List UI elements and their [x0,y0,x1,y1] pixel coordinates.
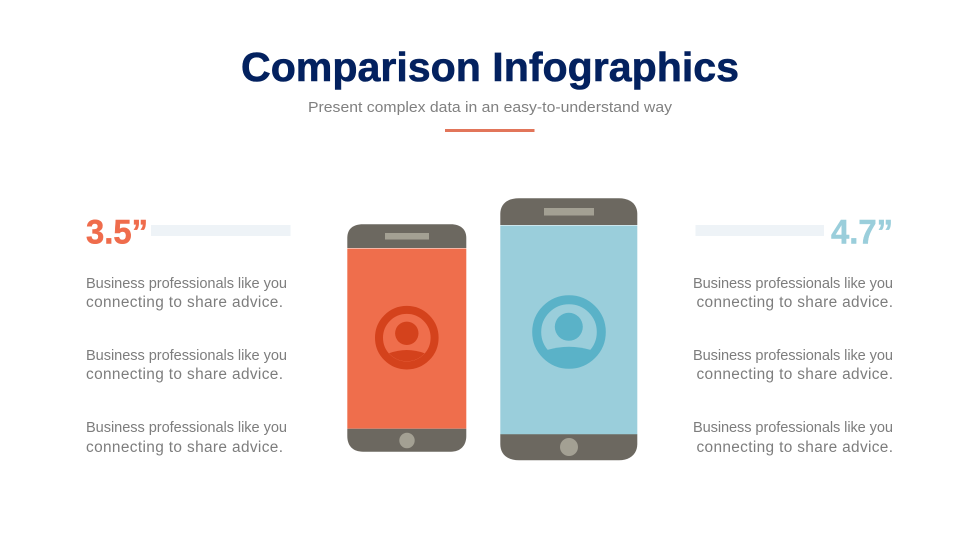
phone bottom bezel [500,434,637,460]
text block right 1: Business professionals like you [693,276,893,292]
icon: large blue phone [500,198,637,460]
icon: small orange phone [347,224,466,452]
text block left 3: Business professionals like you [86,420,287,436]
text block left 1: connecting to share advice. [86,294,283,311]
phone top bezel [500,198,637,225]
icon: user avatar orange [379,310,435,366]
panel: left 3.5 inch column [86,214,290,456]
phone top bezel [347,224,466,248]
phone speaker [544,208,594,216]
icon: user avatar blue [537,300,601,364]
phone speaker [385,233,429,240]
text block right 2: Business professionals like you [693,348,893,364]
text block right 1 [693,276,893,311]
text block left 2: Business professionals like you [86,348,287,364]
phone bottom bezel [347,429,466,452]
text block right 2: connecting to share advice. [696,366,893,383]
title underline accent [445,129,534,132]
size value 4.7: 4.7” [831,214,893,252]
text block right 3: connecting to share advice. [696,439,893,456]
text block right 3 [693,420,893,456]
text block left 1: Business professionals like you [86,276,287,292]
text block left 3: connecting to share advice. [86,439,283,456]
phone screen [347,248,466,429]
text block left 2: connecting to share advice. [86,366,283,383]
title: Comparison Infographics [241,44,739,90]
text block left 2 [86,348,287,383]
size bar right [696,225,824,236]
size bar left [151,225,290,236]
text block right 2 [693,348,893,383]
size value 3.5: 3.5” [86,214,148,252]
home button [399,433,415,448]
text block right 1: connecting to share advice. [696,294,893,311]
text block left 3 [86,420,287,456]
text block right 3: Business professionals like you [693,420,893,436]
panel: right 4.7 inch column [693,214,893,456]
home button [560,438,578,456]
subtitle: Present complex data in an easy-to-understand way [308,99,673,116]
phone screen [500,226,637,434]
text block left 1 [86,276,287,311]
